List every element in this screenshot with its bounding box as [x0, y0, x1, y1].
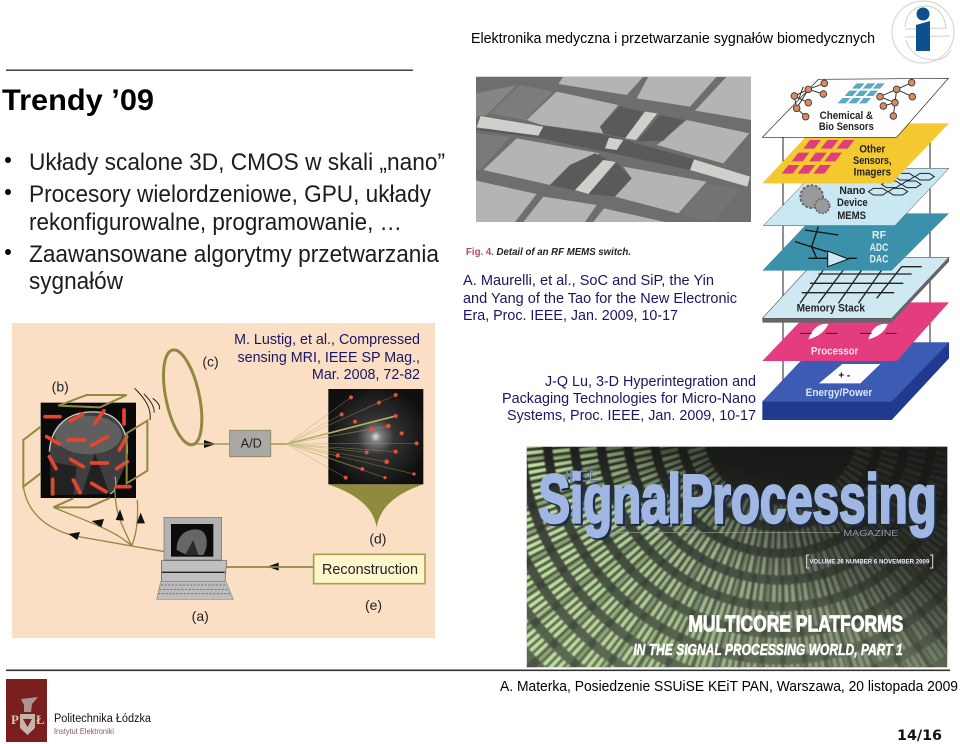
issue info: VOLUME 26 NUMBER 6 NOVEMBER 2009: [809, 559, 930, 566]
masthead: IEEE: [565, 469, 598, 486]
k-space image with samples: [287, 389, 423, 484]
RF wave arcs: [135, 388, 160, 420]
page number: 14/16: [897, 728, 942, 744]
panel: compressed sensing MRI diagram: [12, 323, 435, 638]
citation: Lustig: M. Lustig, et al., Compressed: [234, 332, 420, 348]
layer: processor: [762, 302, 949, 361]
logo: Politechnika Łódzka: P: [11, 712, 19, 727]
laptop with scan: [157, 517, 233, 599]
diagram part labels: (e): [365, 597, 382, 613]
vertical posts: [783, 137, 930, 403]
citation: Lu: Systems, Proc. IEEE, Jan. 2009, 10-17: [507, 408, 756, 424]
bullet list: trends: sygnałów: [29, 268, 124, 295]
header: course title: Elektronika medyczna i przetwarzanie sygnałów biomedycznych: [471, 31, 875, 47]
citation: Lu: Packaging Technologies for Micro-Nano: [502, 391, 756, 407]
citation: Lu: [502, 374, 756, 424]
citation: Lustig: [234, 332, 420, 383]
title: Trendy ’09: [2, 84, 154, 117]
layer: other sensors, imagers: Other: [859, 144, 886, 156]
reconstruction box: [314, 554, 425, 584]
layer: chemical and bio sensors: Chemical &: [820, 110, 873, 122]
layer: RF ADC DAC: [762, 213, 949, 271]
diagram part labels: (b): [52, 378, 69, 394]
cover headline: MULTICORE PLATFORMS: [688, 611, 903, 637]
issue info: [807, 555, 933, 568]
bottom rule: [6, 670, 950, 671]
layer: energy/power: Energy/Power: [806, 387, 873, 399]
bullet list: trends: rekonfigurowalne, programowanie, …: [29, 209, 402, 236]
reconstruction box: Reconstruction: [322, 562, 418, 578]
layer: nano device MEMS: Nano: [839, 185, 865, 197]
magazine cover: IEEE Signal Processing: [526, 446, 948, 668]
logo: Politechnika Łódzka: Ł: [36, 712, 45, 727]
layer: other sensors, imagers: Sensors,: [853, 155, 891, 167]
bullet list: trends: [5, 149, 445, 295]
gradient coil planes and feed lines: [23, 395, 165, 552]
layer: RF ADC DAC: ADC: [870, 242, 889, 254]
layer: processor: Processor: [811, 345, 858, 357]
funnel under k-space: [328, 484, 423, 527]
photo: RF MEMS switch: [476, 77, 751, 222]
logo: Politechnika Łódzka: Politechnika Łódzka: [54, 713, 152, 725]
layer: nano device MEMS: [763, 168, 949, 226]
receiver coil: [156, 347, 209, 448]
layer: energy/power: [762, 342, 949, 420]
top rule: [6, 70, 413, 71]
layer: chemical and bio sensors: Bio Sensors: [819, 121, 874, 133]
layer: memory stack: [762, 257, 949, 323]
A/D converter box: A/D: [241, 436, 262, 450]
icon: faculty "ie" logo: [892, 1, 954, 63]
citation: Lustig: Mar. 2008, 72-82: [312, 367, 420, 383]
layer: nano device MEMS: Device: [837, 197, 868, 209]
layer: energy/power: + -: [838, 370, 850, 381]
citation: Maurelli: and Yang of the Tao for the New Electronic: [463, 291, 737, 307]
diagram: 3D integration layer stack: [762, 78, 949, 420]
bullet list: trends: Zaawansowane algorytmy przetwarzania: [29, 241, 440, 268]
diagram part labels: [52, 353, 386, 624]
citation: Maurelli: A. Maurelli, et al., SoC and SiP, the Yin: [463, 273, 714, 289]
layer: RF ADC DAC: RF: [872, 230, 887, 242]
bullet list: trends: Procesory wielordzeniowe, GPU, układy: [29, 181, 431, 208]
logo: Politechnika Łódzka: [6, 679, 152, 742]
figure caption: MEMS: Fig. 4. Detail of an RF MEMS switch.: [466, 246, 631, 258]
cover headline: [633, 611, 903, 659]
layer: chemical and bio sensors: [762, 78, 948, 137]
A/D converter box: [230, 430, 271, 457]
diagram part labels: (d): [369, 530, 386, 546]
layer: memory stack: Memory Stack: [797, 303, 866, 315]
layer: RF ADC DAC: DAC: [870, 253, 889, 265]
layer: other sensors, imagers: Imagers: [854, 166, 891, 178]
layer: nano device MEMS: MEMS: [837, 210, 866, 222]
arrowheads: [68, 440, 279, 571]
citation: Maurelli: [463, 273, 737, 324]
masthead: MAGAZINE: [843, 528, 899, 538]
diagram part labels: (a): [192, 608, 209, 624]
diagram part labels: (c): [202, 353, 219, 369]
citation: Lustig: sensing MRI, IEEE SP Mag.,: [238, 350, 420, 366]
bullet list: trends: Układy scalone 3D, CMOS w skali „nano”: [29, 149, 445, 176]
logo: Politechnika Łódzka: Instytut Elektroniki: [54, 727, 114, 736]
signal line to A/D: [190, 442, 287, 446]
layer: other sensors, imagers: [762, 123, 949, 183]
citation: Maurelli: Era, Proc. IEEE, Jan. 2009, 10-17: [463, 308, 678, 324]
brain image with red arrows: [41, 403, 136, 498]
citation: Lu: J-Q Lu, 3-D Hyperintegration and: [545, 374, 756, 390]
line to laptop: [227, 564, 314, 569]
